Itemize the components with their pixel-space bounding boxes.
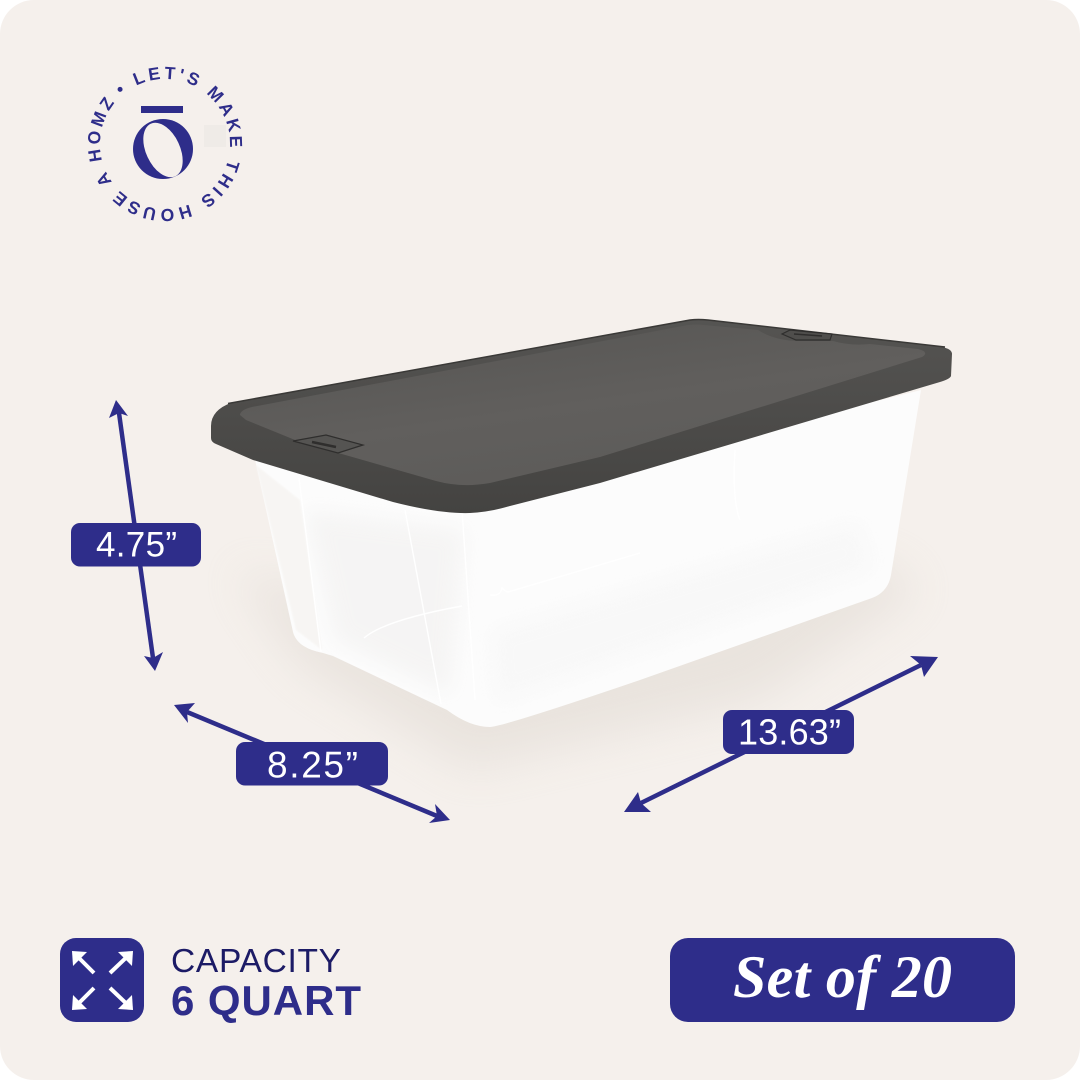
dimension: width 8.25 — [174, 703, 450, 823]
box inner tint — [305, 510, 465, 695]
lid recessed top — [240, 324, 925, 485]
height label — [71, 523, 201, 566]
dimension: length 13.63 — [624, 656, 938, 812]
set badge: Set of 20 — [733, 944, 952, 1010]
lid stamp rear — [782, 330, 832, 340]
icon: expand arrows — [60, 938, 144, 1022]
length arrow — [624, 656, 938, 812]
circular slogan: • LET'S MAKE THIS HOUSE A HOMZ — [88, 66, 242, 222]
height arrow — [109, 400, 163, 671]
grey patch — [204, 125, 226, 147]
width label — [236, 742, 388, 786]
dimension: height 4.75 — [71, 400, 201, 671]
floor shadow — [235, 560, 920, 770]
logo mark: o with macron — [133, 106, 193, 183]
lid stamp front — [293, 435, 363, 453]
width arrow — [174, 703, 450, 823]
length label: 13.63” — [738, 712, 841, 752]
logo badge — [88, 66, 242, 222]
product photo: storage box — [211, 320, 952, 770]
width label: 8.25” — [267, 744, 358, 786]
capacity block — [60, 938, 361, 1024]
capacity label: CAPACITY — [171, 943, 341, 980]
set badge — [670, 938, 1015, 1022]
clear box body — [254, 390, 921, 727]
capacity value: 6 QUART — [171, 977, 361, 1024]
lid outer rim — [211, 320, 952, 513]
box moulded lines — [299, 450, 740, 704]
lid top edge line — [228, 320, 945, 404]
height label: 4.75” — [96, 526, 177, 564]
